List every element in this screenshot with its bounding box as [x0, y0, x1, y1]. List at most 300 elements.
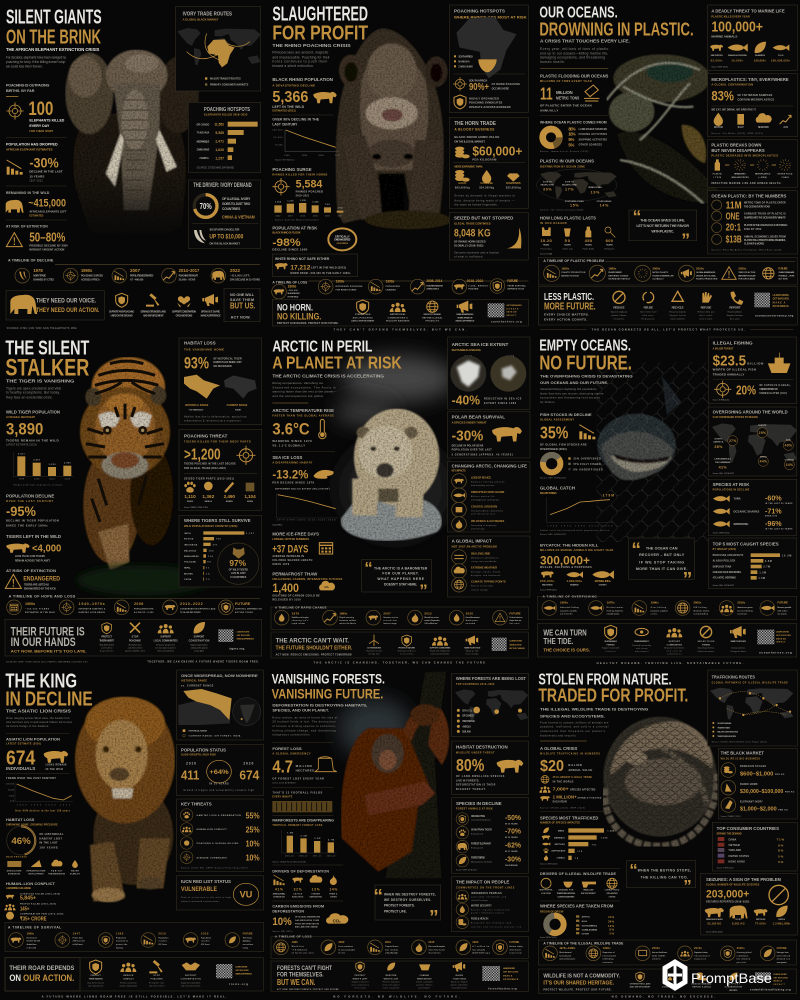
timeline of survival: depends on: [243, 941, 251, 943]
call to action: forests can't fight: MAKE A: [503, 974, 513, 977]
stat: a global crisis: Source: UNODC (2022), WWF (2023): [540, 808, 585, 810]
bar chart: rainforests disappearing: 2011–15: [313, 856, 321, 858]
drivers of deforestation: OTHER: [330, 897, 337, 899]
stat: at risk of extinction: [5, 568, 60, 591]
footer lines: TOGETHER, WE CAN ENSURE A FUTURE WHERE TIGERS ROAM FREE.: [147, 661, 259, 664]
call to action: no horn no killing: DONATE: [506, 307, 519, 310]
panel: top consumer countries: 3%: [778, 860, 784, 864]
panel: poaching threat: POACHING THREAT: [184, 433, 227, 439]
timeline of plastic problem: 1980s: [608, 266, 617, 270]
panel: deadly threat to marine life: A DEADLY THREAT TO MARINE LIFE: [711, 9, 785, 14]
timeline of the illegal wildlife trade: for exotic pets: [559, 954, 571, 957]
panel: global impact: droughts, and heatwaves: [471, 574, 500, 577]
main title: they face an existential crisis.: [6, 395, 53, 399]
bar chart: rainforests disappearing: TROPICAL PRIMARY FOREST LOSS: [272, 824, 323, 827]
stat: remaining in the wild: ~415,000: [28, 198, 66, 210]
panel: ocean plastic by the numbers: [708, 191, 797, 254]
panel: where tigers still survive: WILD POPULATION BY COUNTRY (2023): [184, 524, 237, 528]
footer lines: SOURCES: WWF, TIGER CRISIS 2023, TRAFFIC, PANTHERA, IUCN RED LIST: [6, 661, 88, 664]
panel: poaching hotspots bar chart: POACHING HOTSPOTS: [204, 107, 250, 113]
stat: bycatch: WHALES, DOLPHINS & PORPOISES: [540, 566, 592, 569]
timeline of survival: Population: [201, 936, 211, 939]
call to action: no horn no killing: RAISE AWARENESS.: [456, 313, 474, 316]
stat: habitat loss: FRAGMENTATION: [48, 873, 66, 876]
panel: rhino poaching hotspots map: [449, 5, 528, 112]
timeline of rapid change: 2020: [466, 611, 473, 615]
timeline of loss: intensify forest: [428, 948, 445, 951]
chart: poaching surge: 2012: [276, 216, 280, 218]
panel: overfishing around the world: ASIA: [786, 439, 791, 442]
timeline of loss: of forest per year: [292, 952, 314, 955]
stat: permafrost thaw: RELEASED BY 2100: [272, 598, 301, 601]
panel: ivory trade routes: [176, 7, 261, 91]
panel: the horn trade: MORE EXPENSIVE THAN:: [454, 164, 483, 168]
donut chart: where species are taken from: GLOBAL (OCEANS): [582, 928, 597, 931]
timeline of survival: 50,000–60,000: [27, 941, 40, 943]
timeline of overfishing: [537, 595, 797, 619]
stat: black rhino population: [272, 77, 337, 113]
call to action: less plastic more future: Repurpose.: [642, 317, 655, 320]
timeline of loss: ~7.8 million ha: [292, 949, 308, 951]
panel: top consumer countries: TOP CONSUMER COUNTRIES: [717, 826, 780, 832]
call to action: we can turn the tide: SUSTAINABLE: [604, 640, 618, 643]
bar chart: rainforests disappearing: 5.3M: [314, 838, 321, 840]
main title: toward a silent extinction.: [272, 64, 314, 68]
chart: wild tiger population: 4,057: [33, 459, 41, 462]
timeline of rapid change: Record low sea ice: [424, 617, 439, 619]
panel: species at risk: SWORDFISH: [733, 522, 748, 526]
timeline of plastic problem: PLASTIC PRODUCTION: [696, 278, 718, 281]
main title: [539, 337, 633, 404]
timeline of plastic problem: 2000s: [652, 266, 661, 270]
call to action: wildlife is not a commodity: IT'S OUR SHARED HERITAGE.: [543, 980, 614, 986]
chart: how long plastic lasts: 50: [565, 238, 571, 243]
panel: arctic in peril polar bear: [271, 337, 530, 665]
chart: poaching surge: 2018: [325, 216, 331, 218]
call to action: their future is in our hands: SUPPORT: [160, 637, 172, 639]
timeline of decline: [8, 259, 260, 283]
stat: population at risk: ENDANGERED: [334, 239, 351, 242]
drivers of deforestation: [272, 869, 338, 899]
call to action: wildlife is not a commodity: SUPPORT: [663, 983, 678, 985]
timeline of the illegal wildlife trade: Internet facilitates: [652, 951, 667, 954]
timeline of decline: 1978: [33, 268, 43, 273]
call to action: wildlife is not a commodity: CONSERVATION: [725, 986, 743, 989]
bar chart: rainforests disappearing: 6.4M: [301, 834, 307, 837]
timeline of overfishing: Industrial fishing: [560, 606, 579, 609]
stat: more ice-free days: +37 DAYS: [272, 544, 309, 556]
call to action: we can turn the tide: FISHING: [607, 644, 615, 646]
panel: poaching threat: BONES: [226, 501, 233, 503]
fog background: [338, 698, 412, 758]
map: plastic by ocean zone: NORTH: [543, 182, 552, 184]
stat: remaining in the wild: REMAINING IN THE WILD: [6, 191, 50, 195]
stat: more ice-free days: SINCE 1979: [272, 564, 290, 566]
panel: overfishing around the world: AFRICA: [760, 455, 767, 458]
timeline of decline: IVORY TRADE: [33, 275, 46, 278]
call to action: forests can't fight: RESTORE: [386, 975, 397, 977]
panel: the horn trade: the same as human fingernails.: [454, 203, 498, 207]
chart: wild tiger population: 5,611: [18, 453, 26, 455]
timeline of the illegal wildlife trade: 2020s: [737, 946, 745, 950]
panel: poaching hotspots bar chart: ZAMBIA: [199, 157, 209, 160]
quote: THE OCEAN CAN: [646, 546, 678, 550]
timeline of decline: 1990s: [81, 268, 93, 273]
stat: at risk of extinction: POSSIBLE DECLINE BY 2050: [29, 244, 68, 248]
chart: wild tiger population: LATEST ESTIMATE (2023): [6, 443, 37, 446]
quote: “: [373, 886, 383, 907]
timeline of loss: POACHED: [468, 288, 479, 291]
call to action: no horn no killing: MAKE A DIFFERENCE: [456, 320, 475, 323]
stat: bycatch: SHARKS: [599, 584, 607, 587]
panel: illegal fishing: $23.5: [713, 353, 746, 369]
drivers of illegal wildlife trade: DEMAND FOR: [559, 889, 574, 892]
call to action: arctic can't wait: THE FUTURE SHOULDN'T EITHER.: [276, 646, 353, 652]
drivers of illegal wildlife trade: [539, 872, 620, 898]
bar chart: rainforests disappearing: [272, 819, 337, 863]
stat: 100 elephants killed: EVERY DAY: [29, 123, 50, 128]
main title: faster than they can recover, destroying marine: [540, 391, 604, 395]
map: plastic by ocean zone: INDIAN OCEAN: [588, 186, 602, 189]
call to action: we can turn the tide: TRANSPARENCY: [634, 640, 650, 643]
panel: the driver ivory demand: OF ILLEGAL IVORY: [222, 197, 251, 201]
panel: iucn red list status: IUCN RED LIST STATUS: [181, 879, 231, 884]
quote: MORE THAN IT CAN GIVE.: [636, 567, 687, 571]
panel: iucn red list status: Risk of extinction in the wild is high: [181, 896, 232, 899]
panel: polar bear survival: -30%: [452, 428, 483, 444]
timeline of survival: 411 lions: [158, 943, 167, 946]
stat: habitat loss: MAIN PROCESS: [6, 856, 27, 859]
call to action: arctic can't wait: SUPPORT COMMUNITIES: [430, 648, 451, 650]
call to action: their roar depends on our action: and fragmentation: [88, 984, 103, 987]
timeline of hope and loss: 1940–1970s: [79, 602, 105, 606]
panel: poaching hotspots bar chart: 1,257: [215, 156, 224, 160]
main title: For decades, elephants have been ravaged by: [6, 56, 66, 60]
panel: habitat loss: HISTORICAL RANGE: [185, 404, 209, 407]
stat: bycatch: MILLIONS OF MARINE ANIMALS DIE EVERY YEAR: [540, 548, 613, 552]
panel: global impact: Melting ice contributes to: [471, 556, 499, 559]
chart: poaching surge: 769: [325, 204, 331, 206]
call to action: forests can't fight: LEARN MORE: [503, 967, 516, 970]
panel: population status: Growth is fragile and vulnerability remains high.: [183, 789, 255, 792]
timeline of decline: BANNED BY CITES: [33, 279, 54, 282]
panel: vanishing forests orangutan: [271, 670, 528, 998]
stat: population dropped: DECLINE IN THE LAST: [29, 170, 63, 174]
quote: ”: [683, 569, 692, 590]
panel: deadly threat to marine life: [708, 5, 797, 71]
main title: Its future hangs in the balance.: [6, 724, 50, 728]
call to action: no horn no killing: PROTECT OUR RHINOS. PROTECT OUR FUTURE.: [277, 323, 339, 325]
bar chart: species most trafficked: NUMBER OF SPECIES IMPACTED: [540, 822, 580, 825]
panel: deadly threat to marine life: 52,000+: [711, 58, 723, 62]
call to action: less plastic more future: EVERY CHOICE MATTERS.: [544, 312, 589, 316]
call to action: we can turn the tide: and coastal: [667, 650, 683, 653]
main title: OUR OCEANS AND OUR FUTURE.: [540, 380, 608, 385]
timeline of loss: BLACK RHINOS: [288, 292, 300, 295]
call to action: we can turn the tide: Empower local fishers: [664, 648, 684, 650]
stat: black rhino population: 5,366: [272, 89, 308, 106]
call to action: arctic can't wait: ecosystems: [400, 653, 413, 656]
timeline of hope and loss: FUTURE: [235, 602, 251, 606]
panel: where tigers still survive: RUSSIA: [184, 538, 194, 541]
polar bear photo: [341, 409, 442, 541]
panel: where forests are being lost: [452, 673, 528, 737]
timeline of survival: 1965: [116, 931, 124, 935]
panel: species in decline: Many species declining: [471, 861, 492, 863]
timeline of loss: at unsustainable: [338, 948, 355, 951]
stat: a global crisis: EACH YEAR: [553, 801, 567, 804]
main title: horns continues to push them: [272, 60, 328, 64]
timeline of overfishing: Recovery possible: [777, 607, 791, 609]
stat: bycatch: BYCATCH: THE HIDDEN KILL: [540, 542, 599, 547]
panel: arctic sea ice extent: -40%: [452, 393, 480, 408]
panel: habitat loss: Habitat loss due to deforestation, agriculture,: [184, 415, 248, 418]
call to action: less plastic more future: [538, 287, 797, 325]
timeline of decline: 2022: [230, 268, 241, 273]
panel: the horn trade: $60,000+: [472, 144, 522, 158]
panel: trafficking routes: TRAFFICKING ROUTES: [717, 735, 737, 738]
panel: where forests are being lost: BRAZIL: [462, 709, 473, 712]
donut chart: where species are taken from: [540, 904, 615, 939]
panel: the horn trade: $25,000/kg: [506, 188, 521, 190]
chart: how long plastic lasts: Plastic Bag: [541, 248, 551, 251]
donut chart: where species are taken from: ASIA: [582, 920, 588, 923]
timeline of overfishing: Overfishing: [651, 607, 666, 609]
panel: microplastics: A GLOBAL CONTAMINATION: [711, 83, 753, 87]
call to action: their future is in our hands: LEARN MORE: [237, 631, 250, 634]
panel: impact on people: protect freshwater sources: [471, 912, 504, 915]
timeline of loss: ~500,000: [288, 290, 299, 292]
panel: slaughtered for profit rhino: [272, 4, 528, 332]
stat: 100 elephants killed: POACHING IS OUTPACING: [6, 84, 49, 88]
call to action: their future is in our hands: Strengthen laws: [128, 644, 142, 647]
panel: rhino poaching hotspots map: WHERE RHINOS ARE MOST AT RISK: [454, 15, 527, 19]
call to action: their future is in our hands: SUPPORT: [194, 637, 205, 639]
chart: wild tiger population: A FRAGILE RECOVERY: [6, 415, 36, 419]
timeline of loss: Tropical forest: [385, 945, 399, 948]
call to action: they need our voice: BUT US.: [230, 302, 255, 311]
timeline of rapid change: extent in September: [424, 619, 440, 622]
timeline of decline: 2014–2017: [179, 268, 200, 273]
main title: and irreplaceable. Poaching for their: [272, 55, 331, 59]
quote: WHEN WE DESTROY FORESTS,: [384, 893, 436, 897]
bar chart: rainforests disappearing: 4.7M: [328, 838, 334, 841]
panel: the horn trade: GOLD: [458, 181, 466, 185]
panel: our oceans plastic: [537, 4, 797, 331]
panel: top consumer countries: UNITED STATES: [728, 855, 749, 858]
main title: A PLANET AT RISK: [272, 353, 402, 373]
bar chart: rainforests disappearing: RAINFORESTS ARE DISAPPEARING: [272, 819, 334, 823]
panel: top consumer countries: CHINA: [728, 838, 737, 841]
panel: key threats: POACHING & ILLEGAL KILLING: [197, 842, 239, 845]
panel: where tigers still survive: 16: [206, 573, 210, 575]
footer line: THE ARCTIC IS CHANGING. TOGETHER, WE CAN CHANGE THE FUTURE: [313, 661, 485, 665]
timeline of survival: Project Lion: [116, 936, 126, 939]
panel: plastic breaks down: (<5MM): [758, 176, 767, 179]
timeline of survival: in the wild: [27, 946, 36, 949]
stat: human-lion conflict: 145+: [20, 906, 30, 912]
panel: overfishing around the world: NORTH: [715, 438, 723, 440]
timeline of loss: DEPENDS ON US: [507, 289, 525, 291]
line chart: rhino decline: 1960: [284, 155, 291, 157]
panel: species at risk: -71%: [765, 506, 782, 515]
line chart: rhino decline: 10,000: [275, 145, 283, 147]
map: plastic by ocean zone: DISTRIBUTION BY OCEAN ZONE: [540, 164, 585, 168]
map: plastic by ocean zone: NORTH: [565, 182, 574, 184]
bar chart: rainforests disappearing: 2006–10: [299, 856, 307, 858]
chart: how long plastic lasts: YEARS: [585, 244, 592, 247]
call to action: less plastic more future: Recycle properly.: [669, 311, 686, 314]
panel: arctic sea ice extent: 1980: [464, 354, 473, 358]
donut chart: plastic sources: 5%: [568, 142, 574, 147]
main title: THE ASIATIC LION CRISIS: [6, 709, 71, 714]
call to action: their future is in our hands: STOP: [132, 637, 139, 639]
panel: poaching hotspots bar chart: 1,620: [215, 148, 224, 152]
timeline of overfishing: Awareness grows: [737, 606, 753, 609]
panel: habitat destruction: 80%: [456, 755, 484, 775]
stat: arctic temperature rise: 3.6°C: [272, 420, 310, 439]
panel: population status: POPULATION STATUS: [181, 747, 226, 752]
panel: microplastics: CONTAIN MICROPLASTICS: [737, 98, 774, 102]
timeline of hope and loss: INTENSIVE HUNTING &: [79, 608, 106, 610]
stat: permafrost thaw: [272, 571, 343, 601]
timeline of hope and loss: HABITAT LOSS BEGIN: [79, 611, 105, 614]
panel: overfishing around the world: 49%: [785, 444, 792, 448]
quote: ”: [419, 581, 428, 600]
panel: overfishing around the world: THE CARIBBEAN: [715, 461, 731, 464]
panel: impact on people: COMMUNITIES ON THE FRONT LINES: [456, 887, 515, 889]
stat: arctic temperature rise: VS. 1.1°C GLOBALLY: [272, 444, 305, 448]
main title: underworld that threatens our planet's: [540, 729, 606, 733]
main title: STOLEN FROM NATURE.: [538, 671, 672, 688]
call to action: arctic can't wait: THE ARCTIC CAN'T WAIT.: [276, 638, 349, 645]
call to action: their roar depends on our action: Promote coexistence: [120, 981, 137, 984]
timeline of hope and loss: TO SLOW RECOVERY: [180, 612, 201, 614]
panel: ocean plastic by the numbers: 20:1: [726, 223, 741, 234]
panel: habitat destruction: OF LAND-DWELLING SPECIES: [456, 775, 505, 778]
timeline of loss: 5,584+ RHINOS: [468, 284, 488, 287]
call to action: forests can't fight: Speak up. Support: [451, 981, 468, 984]
call to action: forests can't fight: that protect forests: [452, 987, 467, 990]
panel: overfishing around the world: 34%: [786, 463, 793, 467]
stat: fish stocks in decline: GLOBAL ASSESSMENT: [540, 418, 574, 422]
main title: THE TIGER IS VANISHING: [6, 378, 75, 383]
call to action: their roar depends on our action: THEIR HABITAT: [89, 977, 103, 980]
bar chart: species most trafficked: 1,006: [601, 838, 608, 840]
panel: the horn trade: $34,000/kg: [479, 187, 495, 190]
panel: deadly threat to marine life: 100,000,000+: [771, 58, 791, 62]
stat: tigers left in the wild: LESS THAN 4,000 TIGERS: [15, 555, 45, 558]
main title: VANISHING FORESTS.: [272, 670, 385, 686]
stat: sea ice loss with chart: PER DECADE SINCE 1979: [272, 481, 315, 485]
stat: sea ice loss with chart: [272, 455, 338, 526]
timeline of the illegal wildlife trade: trafficking: [603, 958, 613, 961]
panel: the king in decline lion: [4, 670, 263, 998]
timeline of survival: last lions: [116, 946, 123, 949]
call to action: they need our voice: SUPPORT ANTI-POACHING: [109, 311, 135, 314]
panel: ivory trade routes: IVORY TRADE ROUTES: [183, 11, 232, 17]
bar chart: species most trafficked: Source: CITES (2023): [540, 864, 558, 866]
panel: impact on people: THE IMPACT ON PEOPLE: [456, 879, 509, 884]
stat: carbon emissions: [272, 904, 348, 933]
chart: poaching surge: 1,215: [287, 201, 294, 203]
panel: where tigers still survive: THAILAND: [184, 561, 197, 564]
panel: rhino poaching hotspots map: OCCURS HERE: [492, 88, 509, 90]
call to action: arctic can't wait: RAISE YOUR VOICE: [464, 647, 481, 650]
chart: poaching surge: 2013: [288, 216, 294, 218]
main title: Tigers are apex predators and vital: [6, 386, 61, 390]
stat: habitat loss: IN THE LAST: [39, 841, 58, 845]
stat: carbon emissions: GAS EMISSIONS COME: [295, 919, 320, 922]
panel: silent giants elephant: SOURCES: CITES, IUCN, WWF, SAVE THE ELEPHANTS, MIKE: [7, 327, 77, 330]
chart: how long plastic lasts: YEARS: [606, 244, 613, 247]
white rhino box: LEFT IN THE WILD (2021): [311, 266, 346, 270]
drivers of deforestation: AGRICULTURAL: [273, 892, 286, 895]
call to action: they need our voice: NO ONE WILL: [230, 293, 255, 297]
call to action: we can turn the tide: THE TIDE.: [543, 636, 573, 646]
panel: species in decline: -50%: [505, 813, 521, 822]
panel: microplastics: [708, 73, 797, 137]
line chart: rhino decline: 50,000: [274, 137, 283, 139]
panel: poaching threat: PAWS: [187, 500, 194, 503]
timeline of survival: protect the: [116, 943, 127, 946]
panel: the black market: PER KG: [775, 774, 785, 776]
line chart: rhino decline: 2000: [318, 155, 325, 157]
stat: plastic flooding: METRIC TONS: [556, 95, 579, 100]
stat: habitat loss: HABITAT LOSS: [6, 817, 35, 822]
call to action: less plastic more future: than once.: [642, 314, 655, 317]
timeline of plastic problem: BEFORE IT'S TOO LATE: [738, 274, 756, 277]
call to action: arctic can't wait: Transition to clean: [366, 650, 382, 653]
panel: key threats: 55%: [246, 810, 260, 820]
stat: more ice-free days: MORE ICE-FREE DAYS: [272, 531, 319, 536]
panel: seized but not stopped: of what is trafficked.: [454, 255, 484, 259]
panel: iucn red list status: [177, 876, 263, 910]
panel: microplastics: SEAFOOD: [758, 126, 769, 129]
panel: deadly threat to marine life: 100,000+: [711, 20, 763, 36]
call to action: less plastic more future: Support better: [669, 314, 686, 317]
turtle photo: [607, 54, 730, 204]
timeline of overfishing: coastal stocks: [607, 613, 619, 616]
timeline of survival: FUTURE: [243, 931, 253, 935]
panel: top consumer countries: VIETNAM: [728, 844, 740, 847]
stat: permafrost thaw: UNLEASHING CARBON, INTENSIFYING FUTURES: [272, 577, 343, 581]
call to action: they need our voice: AND ENFORCEMENT: [143, 314, 164, 317]
stat: human-lion conflict: PEOPLE KILLED (2015–2020): [20, 904, 56, 906]
panel: changing arctic changing life: Threatens Arctic communities: [471, 509, 503, 512]
main title: Shattered ecosystems. The Arctic is: [272, 385, 336, 389]
donut chart: where species are taken from: AFRICA: [582, 916, 590, 919]
panel: top consumer countries: 8%: [778, 848, 784, 852]
panel: impact on people: cultural heritage: [471, 899, 488, 902]
timeline of the illegal wildlife trade: 1970s–1980s: [559, 946, 576, 950]
map: plastic by ocean zone: PLASTIC IN OUR OCEANS: [540, 159, 594, 164]
timeline of loss: 2010: [385, 940, 392, 944]
panel: ocean plastic by the numbers: METRIC TONS OF PLASTIC ENTER: [744, 201, 786, 204]
chart: wild tiger population: WILD TIGER POPULATION: [6, 410, 60, 415]
stat: black rhino population: BLACK RHINO POPULATION: [272, 77, 333, 83]
panel: illegal fishing: Source: SOFIA (2020): [713, 399, 730, 402]
timeline of loss: destruction: [428, 952, 440, 955]
stat: habitat loss: [6, 817, 81, 876]
main title: [538, 671, 688, 737]
timeline of overfishing: Distant-water: [607, 606, 624, 609]
call to action: no horn no killing: ANTI-POACHING: [353, 316, 373, 319]
timeline of loss: Fires and droughts: [428, 945, 445, 948]
call to action: their future is in our hands: against wildlife crime: [125, 650, 146, 653]
panel: top 5 most caught species: 1.5M: [758, 578, 765, 580]
panel: iucn red list status: VULNERABLE: [181, 886, 217, 893]
